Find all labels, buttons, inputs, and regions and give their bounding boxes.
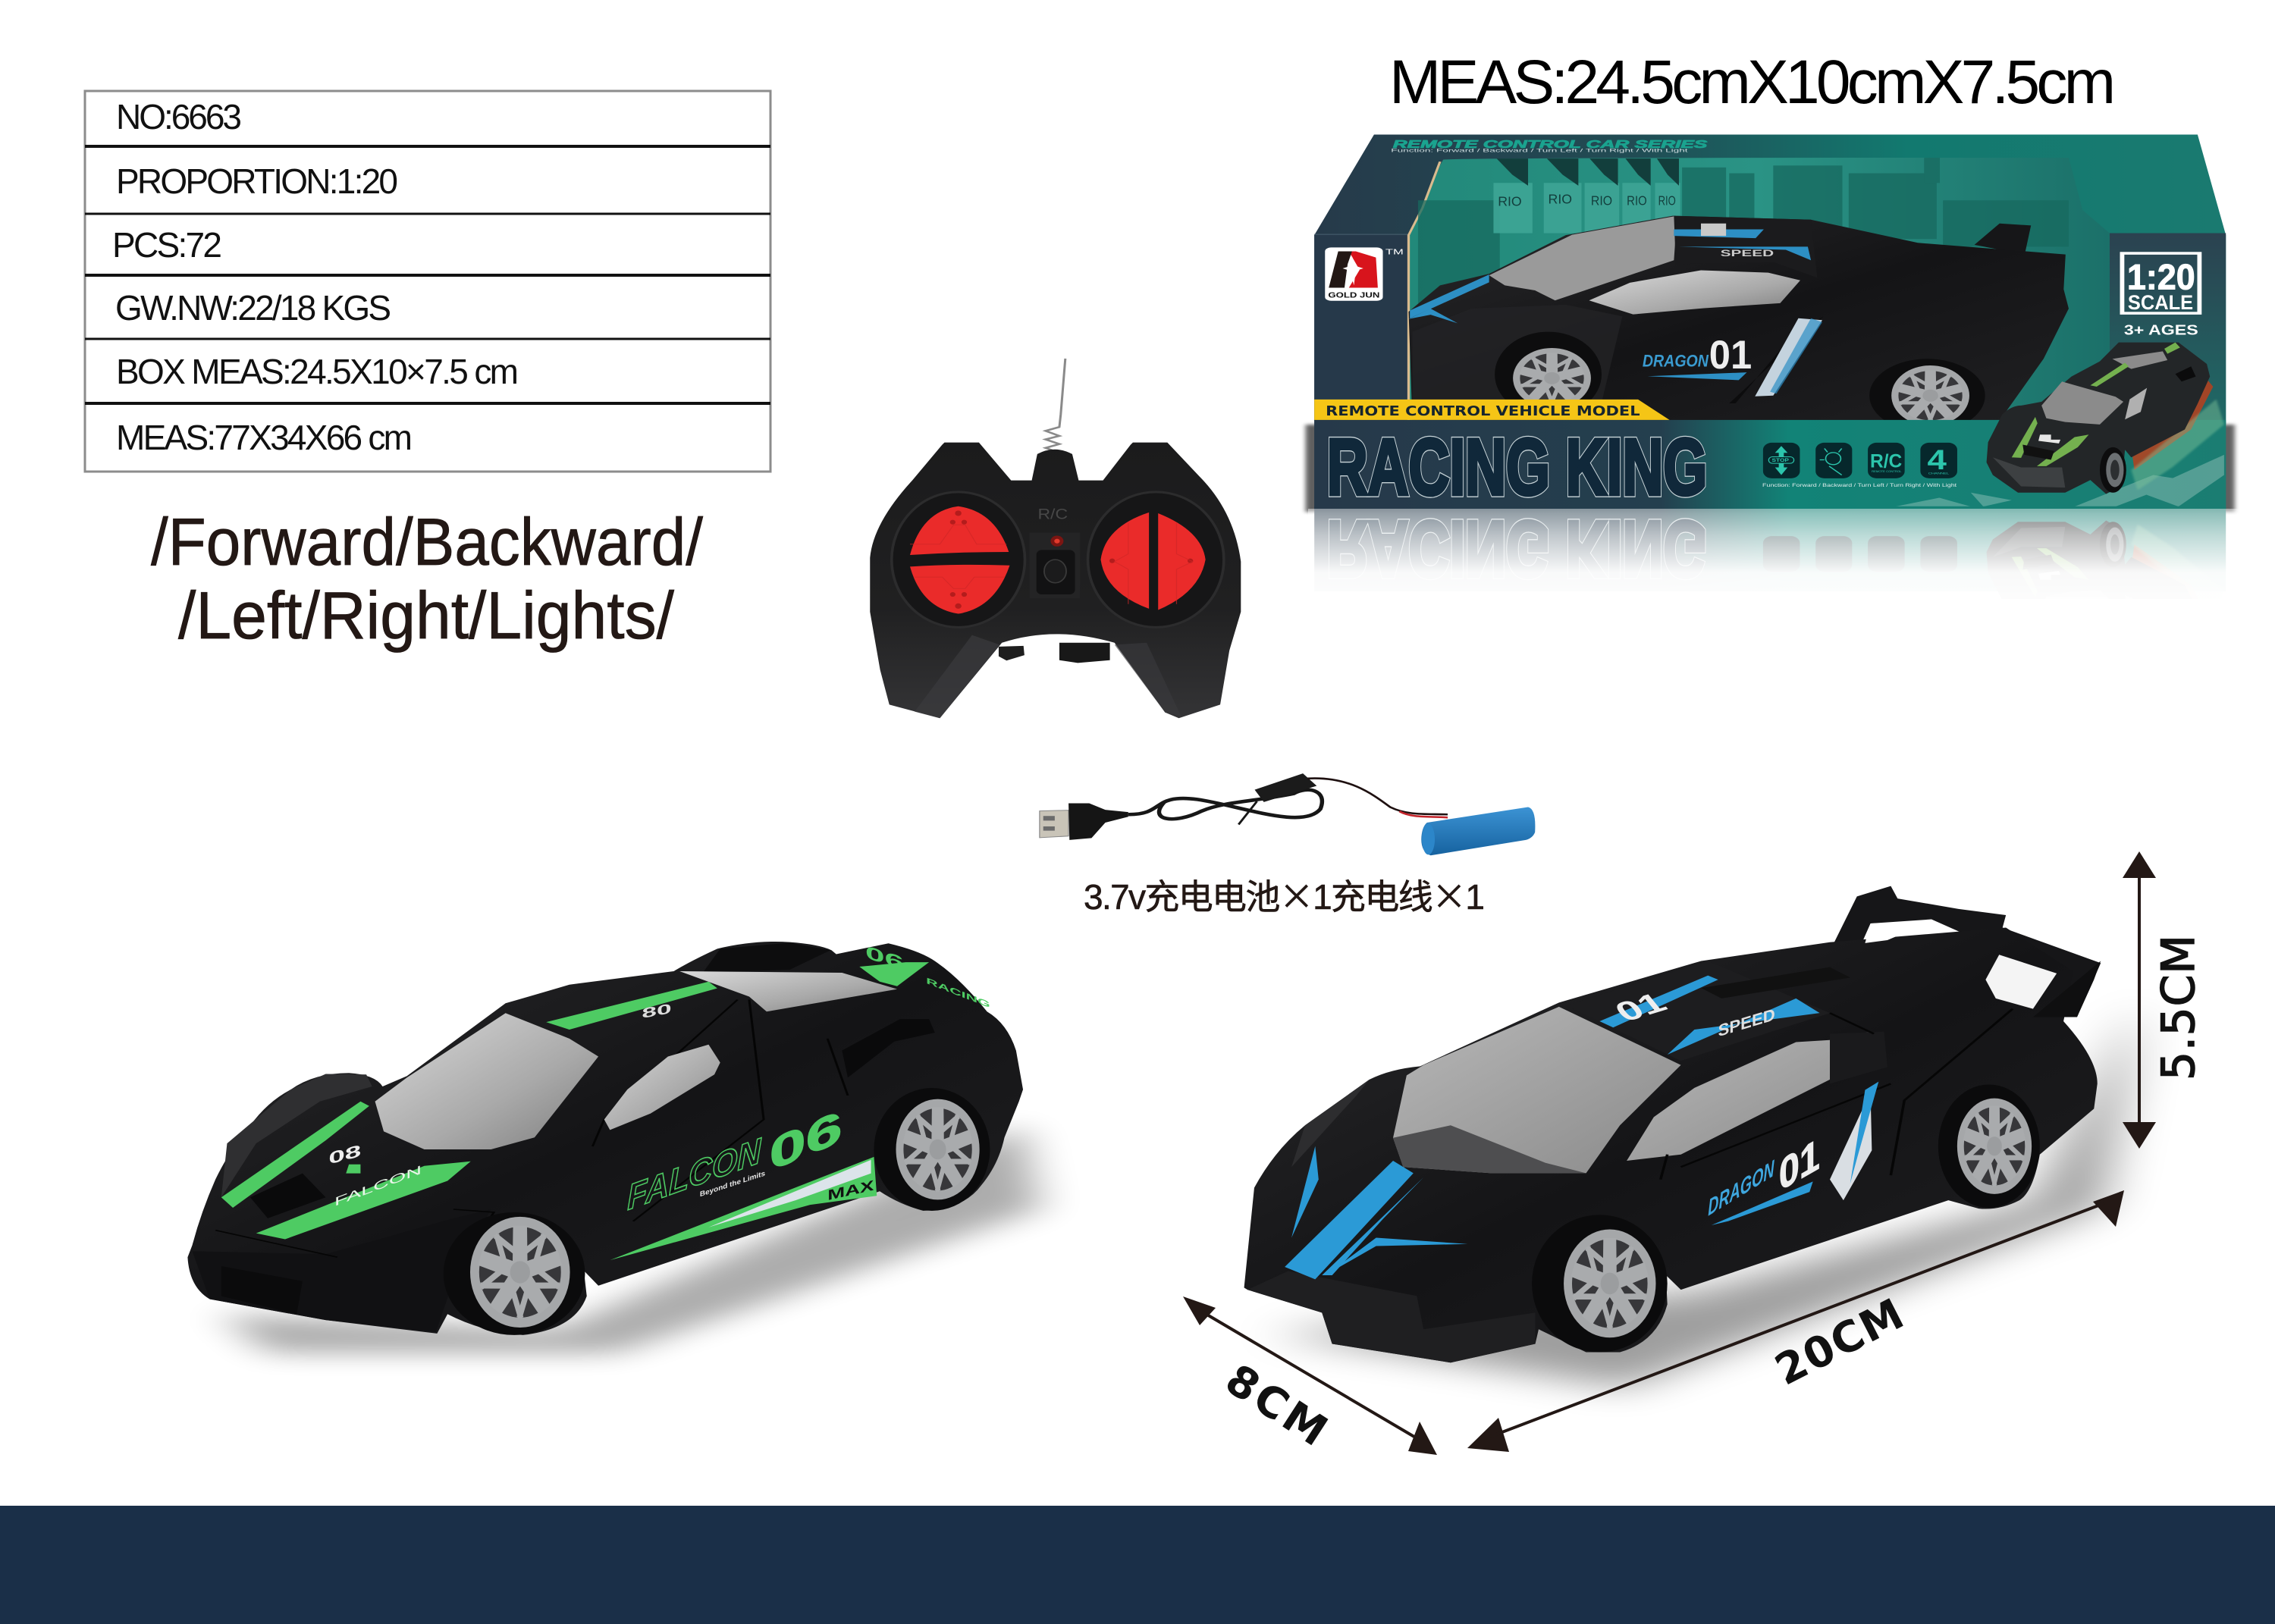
front wheel (1532, 1215, 1668, 1353)
spoiler gap (1985, 955, 2057, 1009)
front wheel (444, 1212, 585, 1335)
road pattern (1895, 455, 2224, 506)
box car (1409, 216, 2069, 432)
green decals (221, 962, 929, 1260)
bonnet number: 08 (328, 1141, 361, 1168)
R/C label: R/C (1037, 506, 1068, 522)
table row: pieces: PCS:72 (112, 225, 222, 265)
low front panel (1314, 420, 2226, 509)
product box (1306, 135, 2235, 512)
battery (1421, 807, 1535, 855)
box window (1409, 158, 2110, 421)
table row: model number: NO:6663 (116, 97, 242, 136)
table row: carton measurements: MEAS:77X34X66 cm (116, 418, 413, 457)
brand logo: GOLD JUN (1328, 291, 1379, 299)
windshield (375, 1013, 598, 1149)
left red buttons (910, 506, 1009, 555)
car shadow (1268, 1001, 2142, 1387)
table row: box measurements: BOX MEAS:24.5X10×7.5 cm (116, 352, 519, 391)
height label: 5.5CM (2152, 935, 2205, 1080)
table row: proportion: PROPORTION:1:20 (116, 161, 398, 201)
scale badge: SCALE (2128, 291, 2193, 314)
windshield (1393, 1007, 1681, 1173)
bottom navy band (0, 1506, 2275, 1624)
feature icons: R/C (1870, 450, 1902, 472)
yellow banner: REMOTE CONTROL VEHICLE MODEL (1326, 403, 1640, 419)
feature icons (1762, 443, 1957, 488)
width label: 8CM (1216, 1355, 1335, 1456)
box window: RIO (1549, 192, 1572, 206)
panel lines (1661, 1009, 2013, 1180)
USB plug (1040, 803, 1128, 840)
red wire (1307, 779, 1448, 814)
box window: RIO (1627, 193, 1647, 208)
roof panel (1566, 961, 1830, 1061)
antenna (1046, 359, 1065, 456)
scale badge (2122, 253, 2199, 338)
length label: 20CM (1768, 1290, 1912, 1395)
rear glass (679, 971, 897, 1011)
front bumper (1247, 1271, 1536, 1362)
green side number: 06 (770, 1100, 843, 1180)
side lettering: DRAGON (1708, 1155, 1774, 1221)
green falcon car: RACING (926, 976, 990, 1010)
top series title: Function: Forward / Backward / Turn Left / Turn Right / With Light (1391, 148, 1688, 153)
cable (1128, 790, 1322, 819)
cable and battery caption: 3.7v充电电池×1充电线×1 (1084, 870, 1485, 920)
specification table (85, 91, 770, 472)
car body (1244, 928, 2098, 1362)
length dimension arrow (1467, 1190, 2124, 1452)
box car: 01 (1709, 333, 1752, 378)
function list text: /Forward/Backward/ (151, 504, 704, 579)
spoiler (1833, 886, 2101, 1017)
bonnet vents (250, 1174, 326, 1218)
feature icons: 4 (1928, 444, 1947, 475)
feature icons: Function: Forward / Backward / Turn Left / Turn Right / With Light (1762, 482, 1957, 488)
box reflection: RACING KING (1327, 504, 1707, 593)
max lettering: MAX (827, 1177, 874, 1204)
blue decals (1285, 976, 1820, 1279)
door graphic (1830, 1082, 1878, 1200)
width dimension arrow (1183, 1296, 1437, 1455)
green falcon car (187, 942, 1039, 1353)
box lower right artwork (1762, 343, 2224, 506)
box window: RIO (1591, 193, 1612, 208)
box reflection: RACING KING (1327, 504, 1707, 593)
car shadow (221, 1125, 1039, 1353)
brand logo: TM (1385, 248, 1404, 256)
green falcon car: 80 (642, 1001, 672, 1021)
charging cable and battery (1040, 773, 1535, 855)
feature icons: REMOTE CONTROL (1872, 470, 1902, 473)
right red buttons (1100, 513, 1149, 609)
falcon lettering: FALCON (627, 1130, 762, 1218)
box measurement heading: MEAS:24.5cmX10cmX7.5cm (1389, 48, 2116, 117)
product box: RACING KING (1327, 423, 1707, 512)
product box: RACING KING (1327, 423, 1707, 512)
function list text (151, 504, 704, 653)
panel lines (215, 999, 848, 1269)
green falcon car: 06 (865, 942, 904, 974)
table row: weight: GW.NW:22/18 KGS (115, 288, 391, 328)
box window: RIO (1658, 193, 1676, 208)
feature icons: STOP (1772, 457, 1789, 463)
yellow banner (1314, 400, 1670, 420)
top series title: REMOTE CONTROL CAR SERIES (1393, 139, 1707, 151)
car body (187, 942, 1023, 1335)
blue dragon car (1244, 886, 2142, 1387)
function list text: /Left/Right/Lights/ (178, 578, 675, 653)
brand logo (1325, 247, 1404, 301)
rear wheel (874, 1088, 990, 1211)
box window: RIO (1498, 194, 1522, 208)
speed lettering: SPEED (1718, 1005, 1775, 1040)
remote controller (870, 359, 1241, 718)
box car: SPEED (1721, 249, 1774, 259)
racing king title (1327, 423, 1707, 512)
centre joystick (1030, 532, 1080, 598)
box car: DRAGON (1643, 352, 1709, 371)
blue dragon car: 01 (1608, 987, 1674, 1027)
box shadow (1306, 425, 2235, 512)
feature icons: CHANNEL (1928, 472, 1950, 475)
grille (221, 1266, 303, 1314)
green falcon car: Beyond the Limits (700, 1170, 765, 1199)
side window (604, 1045, 720, 1130)
side window (1627, 1032, 1871, 1161)
scale badge: 1:20 (2127, 258, 2195, 297)
scale badge: 3+ AGES (2124, 323, 2198, 338)
controller body (870, 443, 1241, 718)
rear fin (2033, 961, 2101, 1017)
rear wheel (1938, 1084, 2040, 1208)
height dimension arrow (2123, 851, 2156, 1149)
green falcon car: FALCON (334, 1163, 422, 1209)
corner car (1987, 343, 2224, 494)
box body (1314, 135, 2226, 509)
box reflection (1308, 504, 2260, 682)
blue dragon car: 01 (1779, 1129, 1820, 1200)
